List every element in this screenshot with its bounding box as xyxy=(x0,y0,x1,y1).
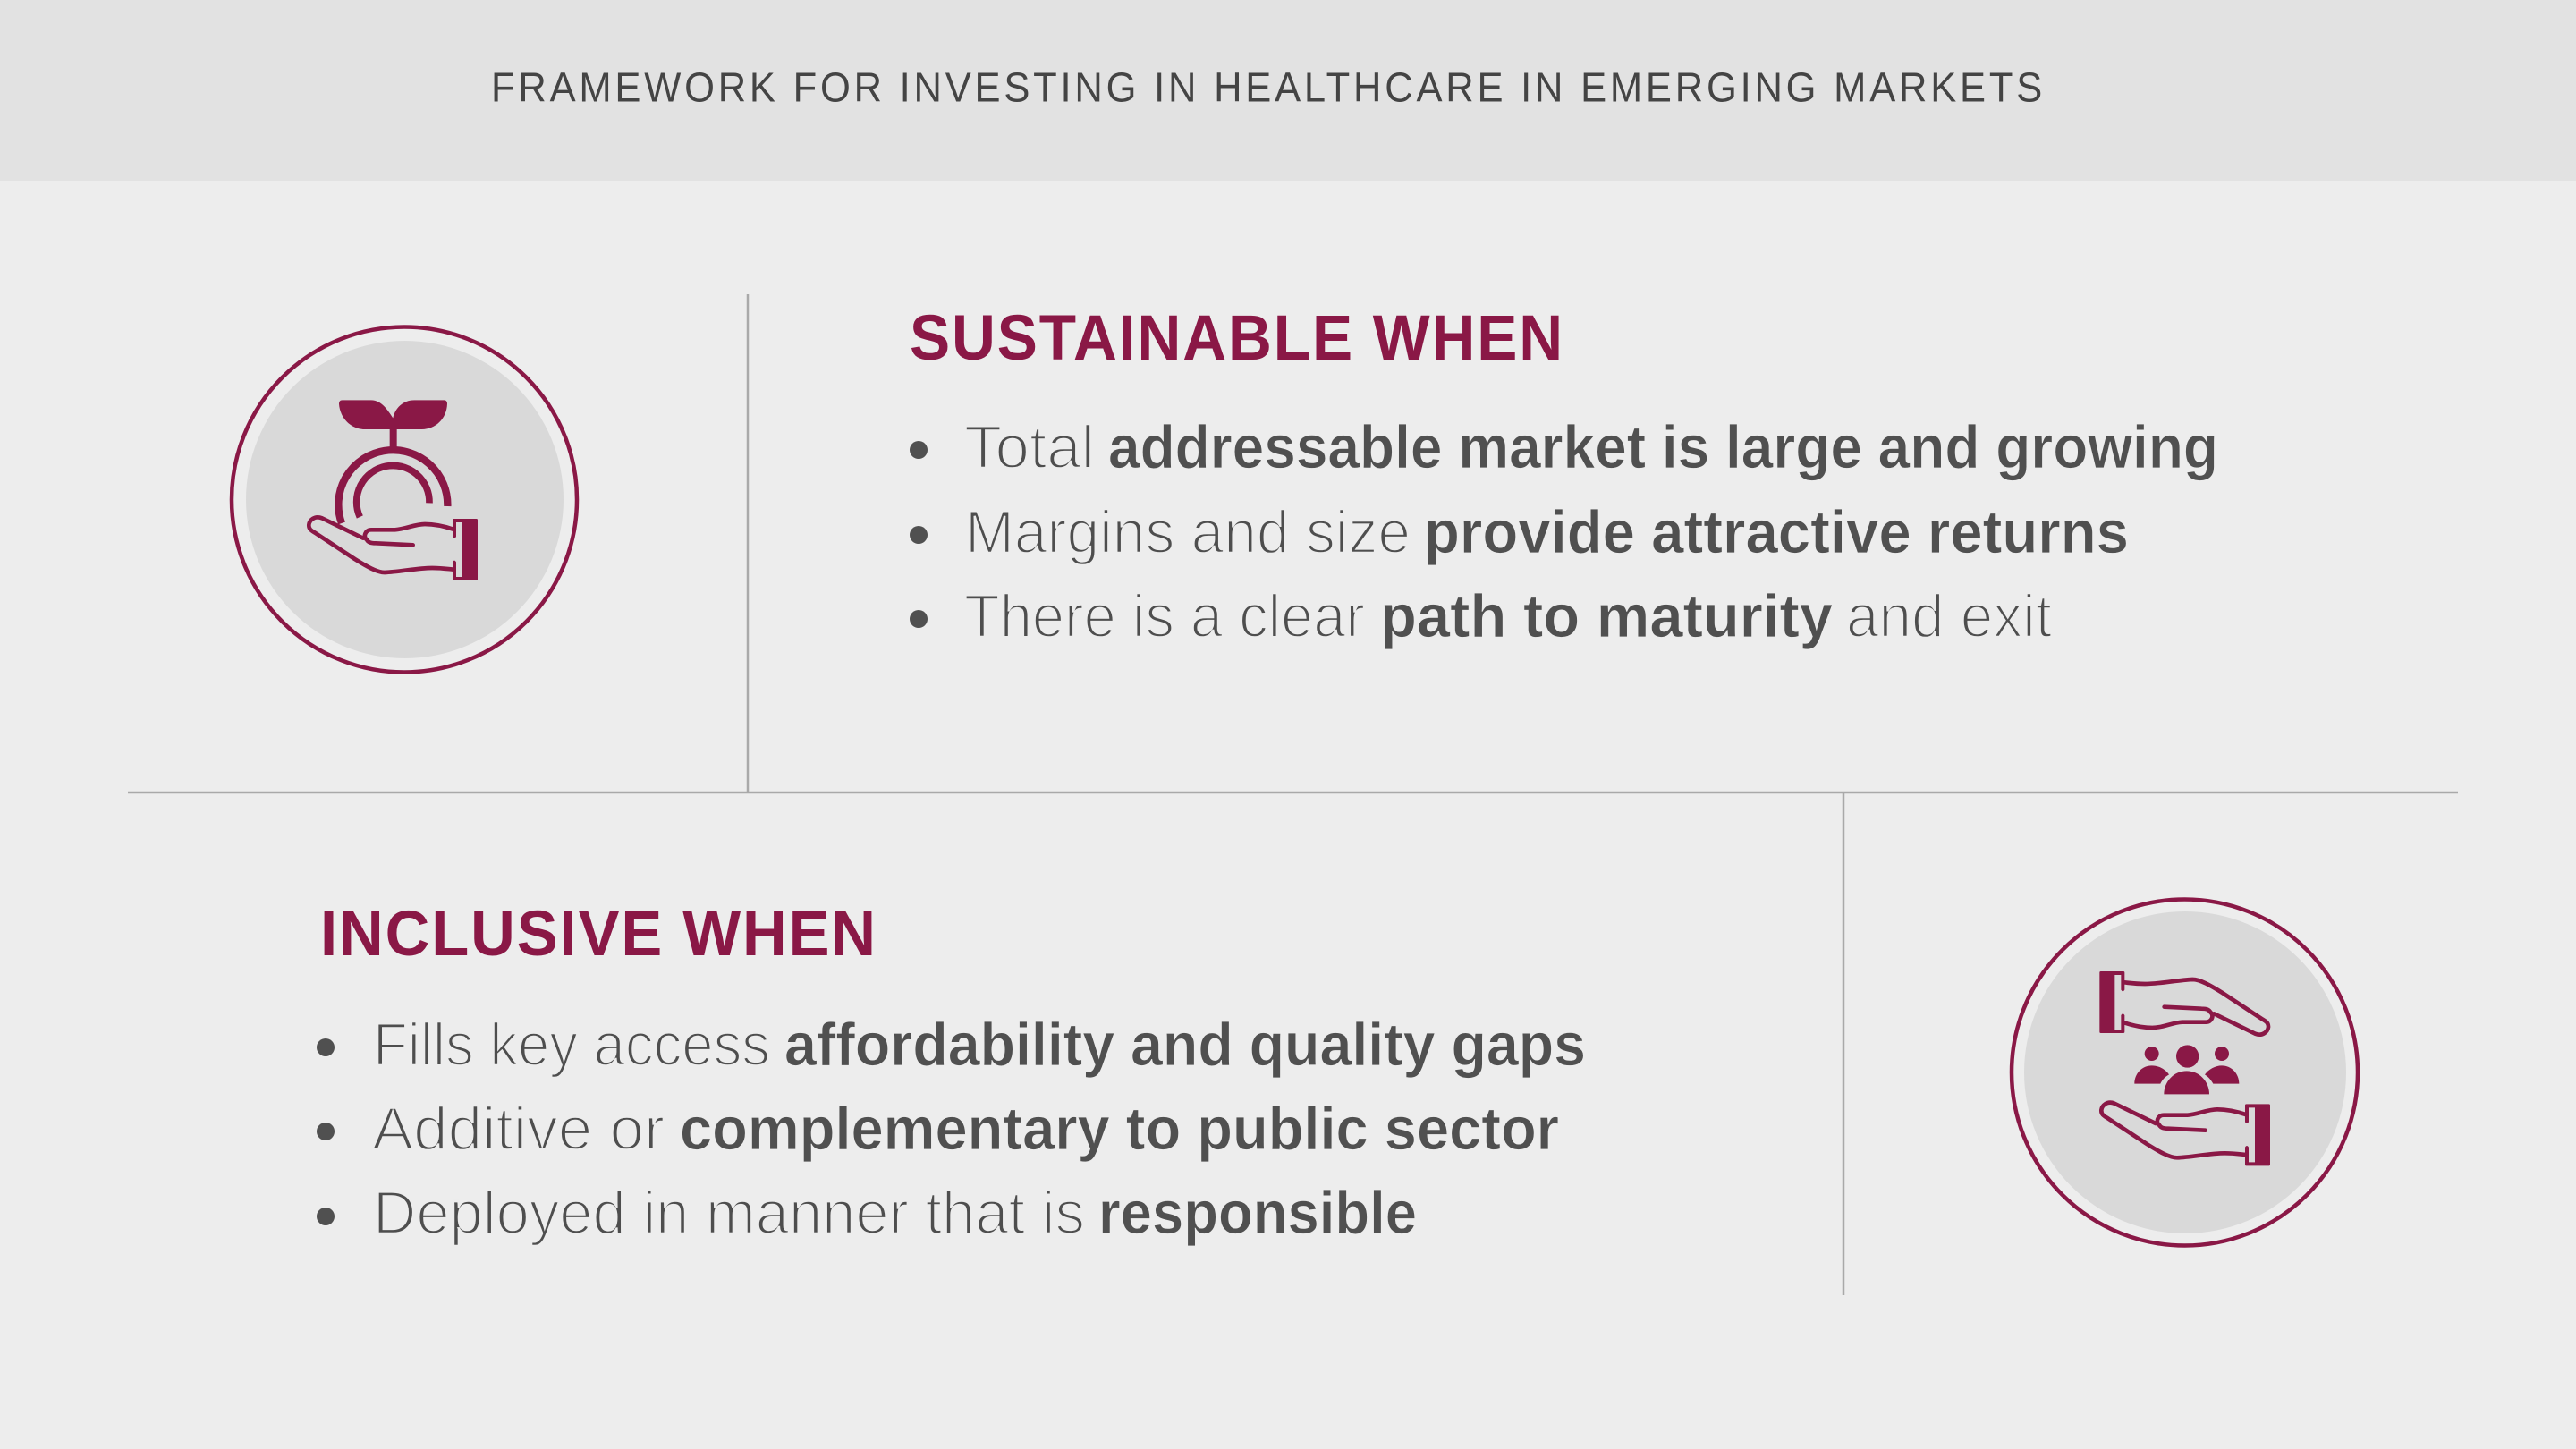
bullet 1: affordability and quality gaps xyxy=(784,1011,1586,1079)
heading: sustainable when: SUSTAINABLE WHEN xyxy=(910,303,1564,374)
icon: group of people xyxy=(2134,1045,2239,1094)
bullet 2: Margins and size xyxy=(965,498,1411,566)
bullet 2 xyxy=(910,498,2129,566)
icon: lower hand xyxy=(2101,1103,2270,1165)
bullet 3 xyxy=(317,1179,1417,1247)
bullet 1: Fills key access xyxy=(373,1011,770,1079)
heading: inclusive when: INCLUSIVE WHEN xyxy=(320,899,877,970)
bullet 3: Deployed in manner that is xyxy=(373,1179,1085,1247)
bullet 3: path to maturity xyxy=(1380,582,1833,650)
bullet 3: There is a clear xyxy=(964,582,1365,650)
bullet 3 xyxy=(910,582,2052,650)
panel: inclusive when xyxy=(317,899,1586,1247)
bullet 1: addressable market is large and growing xyxy=(1108,413,2218,481)
bullet 2 xyxy=(317,1095,1559,1163)
panel: sustainable when xyxy=(910,303,2218,650)
panel: inclusive icon xyxy=(2012,900,2358,1245)
bullet 1 xyxy=(317,1011,1586,1079)
icon: upper hand xyxy=(2099,971,2268,1035)
bullet 3: responsible xyxy=(1098,1179,1417,1247)
bullet 2: Additive or xyxy=(372,1095,665,1163)
panel: sustainable icon xyxy=(232,327,577,673)
bullet 3: and exit xyxy=(1846,582,2052,650)
icon: sprout and coin on open hand xyxy=(309,400,478,580)
bullet 2: provide attractive returns xyxy=(1424,498,2129,566)
icon: two hands protecting people xyxy=(2099,971,2270,1165)
title: FRAMEWORK FOR INVESTING IN HEALTHCARE IN EMERGING MARKETS xyxy=(491,64,2046,111)
header band xyxy=(0,0,2576,181)
bullet 1: Total xyxy=(964,413,1095,481)
bullet 2: complementary to public sector xyxy=(680,1095,1559,1163)
